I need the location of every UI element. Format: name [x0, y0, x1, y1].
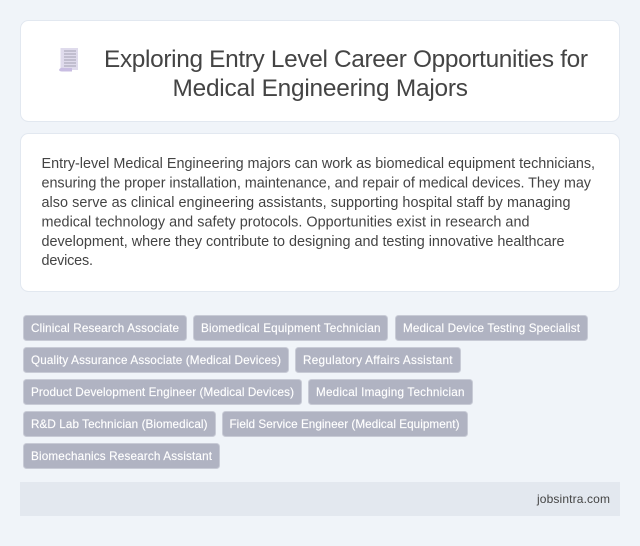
tag: Quality Assurance Associate — [24, 348, 288, 372]
footer source text: jobsintra.com — [536, 492, 610, 506]
title — [104, 46, 588, 102]
tag: Medical Device Testing Specialist — [396, 316, 588, 340]
tag: Field Service Engineer — [222, 412, 468, 436]
tag: Biomedical Equipment Technician: Biomedical Equipment Technician — [201, 322, 380, 335]
tag: Biomedical Equipment Technician — [194, 316, 388, 340]
text block: description: development, where they contribute to designing and testing innovative healthcare — [42, 234, 564, 250]
tag: Medical Device Testing Specialist: Medical Device Testing Specialist — [403, 322, 581, 335]
tag: Clinical Research Associate — [24, 316, 186, 340]
text block: description: medical technology and safety protocols. Opportunities exist in research and — [42, 214, 530, 230]
tag: Quality Assurance Associate: Quality Assurance Associate (Medical Devices) — [31, 354, 281, 367]
tag: Product Development Engineer — [24, 380, 302, 404]
tag: R&D Lab Technician — [24, 412, 216, 436]
text block: description: Entry-level Medical Engineering majors can work as biomedical equipment technicians, — [42, 156, 595, 172]
text block: description: ensuring the proper installation, maintenance, and repair of medical devices. They may — [42, 176, 592, 192]
tag: Biomechanics Research Assistant — [24, 444, 220, 468]
tag: Regulatory Affairs Assistant — [296, 348, 460, 372]
title: Exploring Entry Level Career Opportunities for — [104, 46, 588, 73]
title: Medical Engineering Majors — [172, 75, 468, 102]
tag: Biomechanics Research Assistant: Biomechanics Research Assistant — [31, 450, 213, 463]
tag: Medical Imaging Technician — [308, 380, 472, 404]
text block: description: devices. — [42, 253, 93, 269]
text block: description: also serve as clinical engineering assistants, supporting hospital staff by managing — [42, 195, 570, 211]
text block: description — [42, 156, 595, 269]
icon: document — [59, 48, 78, 72]
footer — [20, 482, 620, 516]
panel: description — [20, 134, 620, 292]
panel: career tags — [24, 316, 588, 468]
tag: R&D Lab Technician: R&D Lab Technician (Biomedical) — [31, 418, 208, 431]
tag: Field Service Engineer: Field Service Engineer (Medical Equipment) — [230, 418, 460, 431]
panel: title header — [20, 20, 620, 122]
tag: Clinical Research Associate: Clinical Research Associate — [31, 322, 179, 335]
tag: Medical Imaging Technician: Medical Imaging Technician — [316, 386, 464, 399]
tag: Product Development Engineer: Product Development Engineer (Medical Devices) — [31, 386, 294, 399]
tag: Regulatory Affairs Assistant: Regulatory Affairs Assistant — [303, 354, 453, 367]
